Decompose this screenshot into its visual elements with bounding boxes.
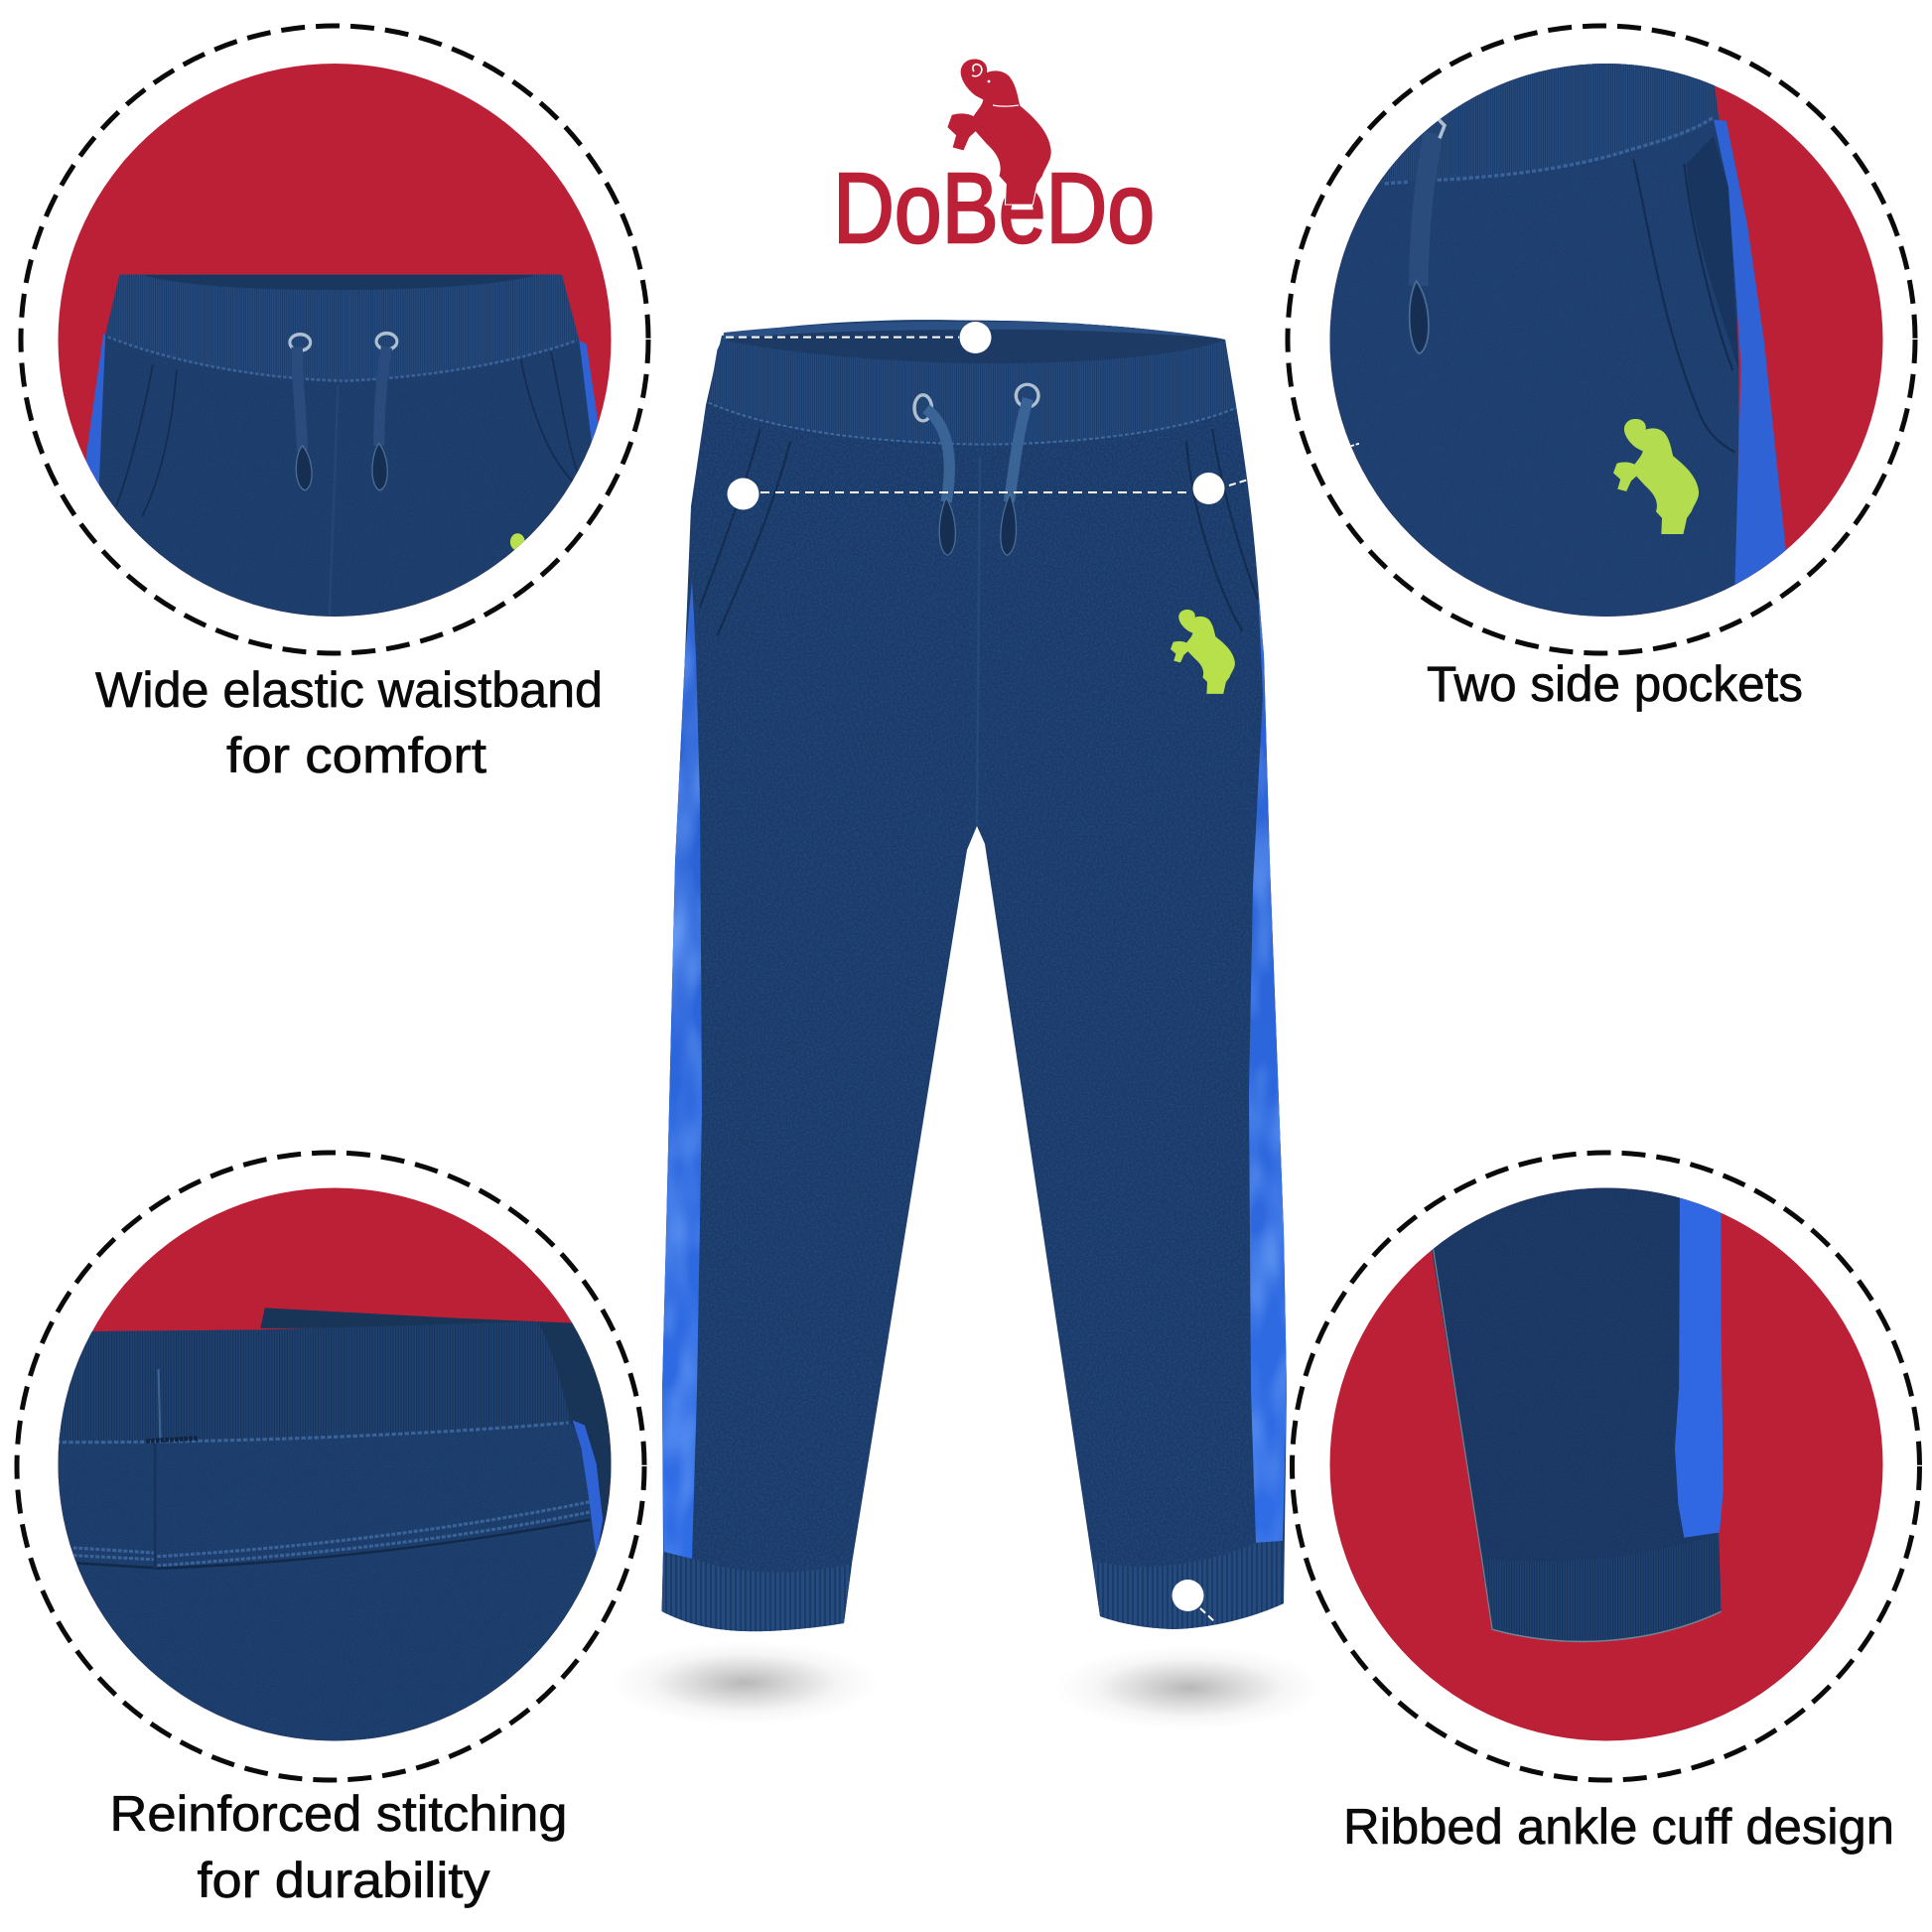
marker dot: right pocket bbox=[1193, 473, 1225, 504]
waist dashed line bbox=[726, 337, 959, 339]
floor shadow: left bbox=[611, 1641, 879, 1725]
logo: DoBeDo bbox=[833, 60, 1155, 264]
panel: waistband detail bbox=[21, 26, 648, 653]
pants body bbox=[662, 320, 1287, 1631]
panel: ankle cuff detail bbox=[1293, 1153, 1920, 1780]
marker dot: cuff bbox=[1172, 1580, 1203, 1611]
caption: waistband: Wide elastic waistband bbox=[95, 662, 603, 718]
caption: stitching: Reinforced stitching bbox=[109, 1786, 568, 1842]
dashed ring: pockets bbox=[1288, 26, 1915, 653]
caption: waistband: for comfort bbox=[226, 728, 486, 783]
side pocket close-up bbox=[1330, 64, 1882, 617]
waistband close-up bbox=[50, 55, 625, 630]
left ribbed cuff bbox=[662, 1552, 852, 1631]
marker dot: left pocket bbox=[727, 479, 759, 510]
icon: lime elephant badge bbox=[1171, 610, 1235, 694]
waistband and drawstring details bbox=[700, 321, 1258, 635]
panel: stitching detail bbox=[17, 1153, 644, 1780]
caption: waistband bbox=[95, 662, 603, 783]
left blue side stripe bbox=[662, 581, 702, 1559]
stitching close-up bbox=[43, 1181, 625, 1757]
right ribbed cuff bbox=[1092, 1541, 1284, 1629]
logo wordmark: DoBeDo bbox=[833, 153, 1155, 264]
panel: side pockets detail bbox=[1288, 26, 1915, 653]
center seam bbox=[977, 457, 980, 826]
caption: stitching bbox=[109, 1786, 568, 1908]
right blue side stripe bbox=[1249, 586, 1287, 1543]
marker dot: waist bbox=[959, 322, 991, 353]
dashed ring: stitching bbox=[17, 1153, 644, 1780]
dashed ring: cuff bbox=[1293, 1153, 1920, 1780]
floor shadow: right bbox=[1055, 1646, 1323, 1729]
hip dashed line bbox=[760, 491, 1191, 493]
dashed ring: waistband bbox=[21, 26, 648, 653]
main jogger pants bbox=[662, 320, 1287, 1631]
callout markers on pants bbox=[726, 322, 1255, 1623]
caption: pockets: Two side pockets bbox=[1427, 656, 1803, 712]
cuff leader line bbox=[1200, 1608, 1216, 1623]
caption: cuff: Ribbed ankle cuff design bbox=[1343, 1799, 1894, 1855]
icon: lime elephant badge (close-up) bbox=[1613, 419, 1699, 534]
ankle cuff close-up bbox=[1320, 1177, 1896, 1757]
caption: stitching: for durability bbox=[197, 1853, 489, 1908]
icon: red rearing elephant bbox=[947, 60, 1051, 205]
pocket leader line bbox=[1229, 478, 1255, 485]
